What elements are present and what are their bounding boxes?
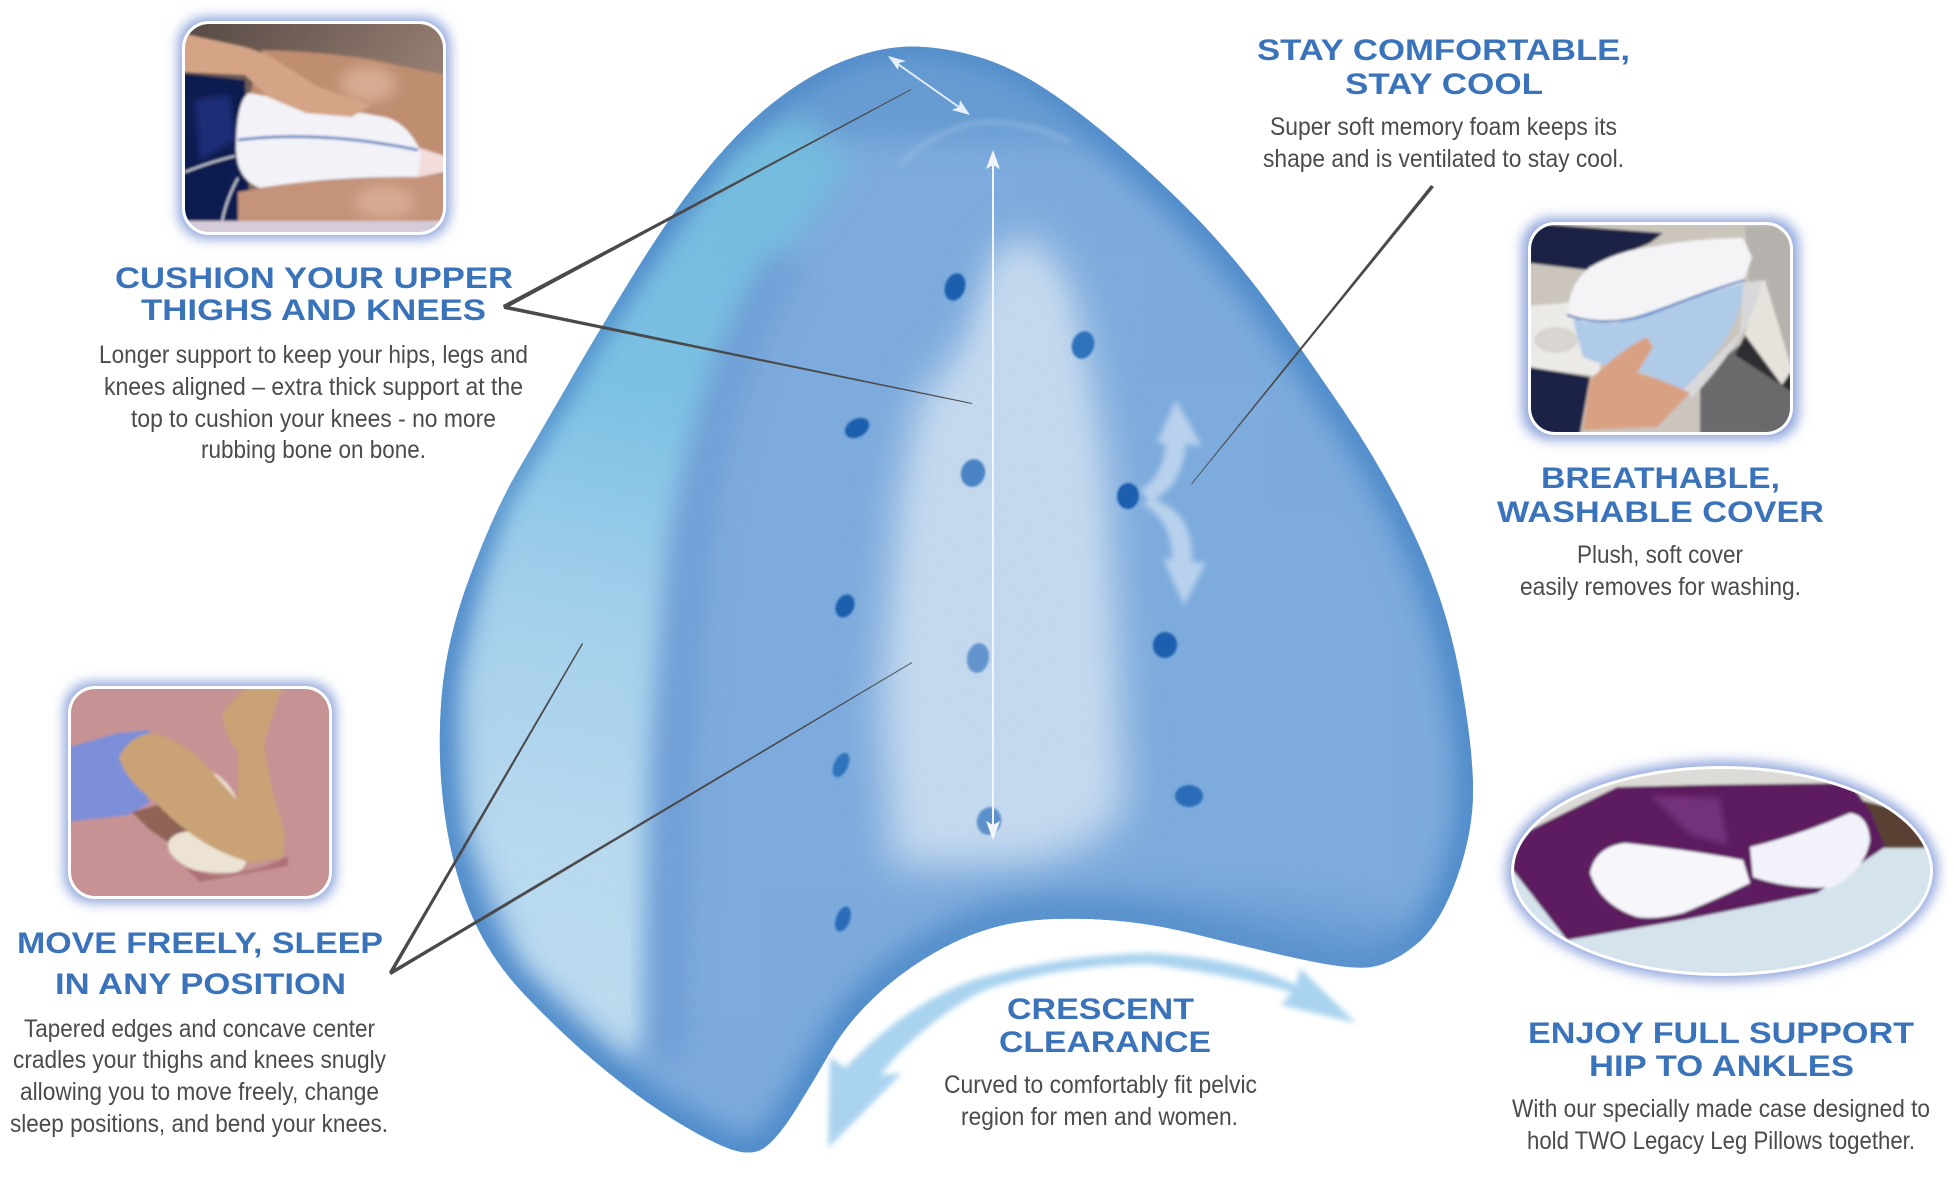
text: cushion description: knees aligned – extra thick support at the <box>104 373 523 401</box>
pointer lines: move freely <box>389 643 912 975</box>
pointer line: stay cool <box>1191 185 1434 484</box>
text: crescent description <box>944 1071 1257 1131</box>
text: move freely description: allowing you to move freely, change <box>20 1078 379 1106</box>
panel: memory foam pillow illustration <box>420 30 1500 1170</box>
heading: cushion: THIGHS AND KNEES <box>141 294 486 327</box>
ventilation holes <box>829 271 1203 934</box>
text: crescent description: region for men and women. <box>961 1103 1238 1131</box>
heading: cushion: CUSHION YOUR UPPER <box>115 262 513 295</box>
text: crescent description: Curved to comfortably fit pelvic <box>944 1071 1257 1099</box>
text: washable cover description: easily removes for washing. <box>1520 573 1801 601</box>
heading: washable cover <box>1497 462 1824 529</box>
heading: full support: ENJOY FULL SUPPORT <box>1528 1017 1914 1050</box>
heading: crescent clearance: CRESCENT <box>1007 993 1194 1026</box>
text: move freely description: sleep positions, and bend your knees. <box>10 1110 388 1138</box>
text: stay cool description: Super soft memory foam keeps its <box>1270 113 1617 141</box>
text: full support description <box>1512 1095 1930 1155</box>
heading: full support <box>1528 1017 1914 1083</box>
photo: hand on pillow between knees <box>178 17 450 239</box>
text: stay cool description <box>1263 113 1624 173</box>
text: cushion description: top to cushion your knees - no more <box>131 405 496 433</box>
heading: move freely: MOVE FREELY, SLEEP <box>17 927 383 960</box>
heading: crescent clearance <box>999 993 1211 1059</box>
text: cushion description <box>99 341 528 464</box>
heading: move freely: IN ANY POSITION <box>55 968 346 1001</box>
pillow body <box>420 30 1500 1170</box>
icon: airflow arrows <box>1140 400 1206 606</box>
text: washable cover description <box>1520 541 1801 601</box>
text: cushion description: Longer support to keep your hips, legs and <box>99 341 528 369</box>
text: move freely description: cradles your thighs and knees snugly <box>13 1046 386 1074</box>
text: move freely description: Tapered edges and concave center <box>24 1015 375 1043</box>
heading: move freely <box>17 927 383 1001</box>
text: washable cover description: Plush, soft cover <box>1577 541 1743 569</box>
heading: washable cover: BREATHABLE, <box>1541 462 1780 495</box>
photo: woman side sleeping with pillow <box>64 682 336 903</box>
heading: washable cover: WASHABLE COVER <box>1497 496 1824 529</box>
crescent clearance arrow <box>828 953 1356 1148</box>
icon: vertical length arrow <box>986 150 1000 840</box>
text: move freely description <box>10 1015 388 1138</box>
pointer lines: cushion <box>503 89 972 404</box>
text: stay cool description: shape and is ventilated to stay cool. <box>1263 145 1624 173</box>
heading: full support: HIP TO ANKLES <box>1589 1050 1854 1083</box>
heading: stay cool: STAY COOL <box>1345 68 1543 101</box>
heading: stay cool <box>1257 34 1630 101</box>
icon: double arrow depth <box>888 56 970 115</box>
heading: crescent clearance: CLEARANCE <box>999 1026 1211 1059</box>
photo: removing washable cover <box>1522 218 1799 440</box>
heading: stay cool: STAY COMFORTABLE, <box>1257 34 1630 67</box>
text: cushion description: rubbing bone on bone. <box>201 436 426 464</box>
photo: two pillows in a shared case <box>1505 761 1940 981</box>
heading: cushion <box>115 262 513 327</box>
text: full support description: hold TWO Legacy Leg Pillows together. <box>1527 1127 1915 1155</box>
